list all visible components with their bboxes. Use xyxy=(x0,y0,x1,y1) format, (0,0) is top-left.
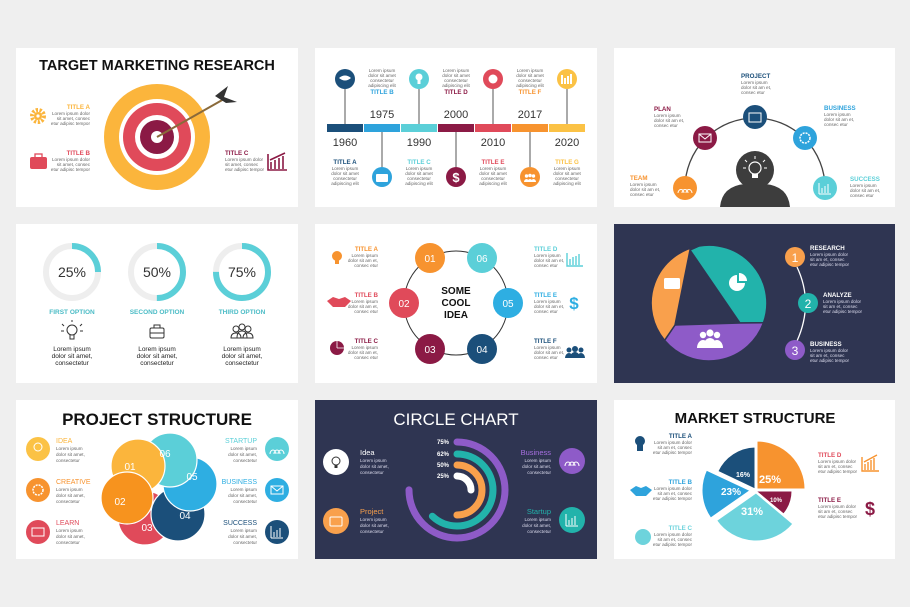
steps: etur adipisc tempor xyxy=(810,262,850,267)
labels: dolor sit am et, xyxy=(630,187,660,192)
item: title C: sit amet, consec xyxy=(225,162,259,167)
swirl circle xyxy=(651,245,767,361)
left items: consec etur xyxy=(354,263,378,268)
option texts: consectetur xyxy=(140,360,175,367)
left items: consectetur xyxy=(56,458,80,463)
left items: dolor sit amet, xyxy=(56,493,85,498)
left items: etur adipisc tempor xyxy=(653,542,692,547)
timeline bar xyxy=(327,124,585,132)
donut 50: 50% xyxy=(143,264,171,280)
steps: 2 xyxy=(805,297,812,311)
right items: consec etur xyxy=(534,355,558,360)
left items: LEARN xyxy=(56,520,79,527)
item: title B: Lorem ipsum dolor xyxy=(52,157,90,162)
flower petals: 04 xyxy=(179,511,191,522)
left items: Lorem ipsum xyxy=(360,458,387,463)
timeline texts: Lorem ipsum xyxy=(369,68,395,73)
right items: dolor sit amet, xyxy=(228,534,257,539)
timeline texts: dolor sit amet xyxy=(368,73,397,78)
title: TARGET MARKETING RESEARCH xyxy=(39,58,275,74)
years: 1975 xyxy=(370,109,394,121)
timeline texts xyxy=(331,68,582,186)
pie chart xyxy=(702,441,805,541)
left items: consectetur xyxy=(360,470,384,475)
right items: TITLE F xyxy=(534,338,557,345)
right items xyxy=(818,452,879,519)
timeline texts: adipiscing elit xyxy=(331,181,360,186)
item: title A xyxy=(32,104,91,126)
timeline texts: dolor sit amet xyxy=(553,171,582,176)
timeline texts: TITLE E xyxy=(481,159,505,166)
option texts xyxy=(52,346,263,367)
center text xyxy=(441,286,471,321)
labels: Lorem ipsum xyxy=(850,183,877,188)
timeline texts: Lorem ipsum xyxy=(480,166,506,171)
timeline texts: TITLE B xyxy=(370,89,394,96)
item: title C: Lorem ipsum dolor xyxy=(225,157,264,162)
timeline texts: consectetur xyxy=(518,78,542,83)
left items: consectetur xyxy=(56,499,80,504)
right items: sit am et, consec xyxy=(818,509,853,514)
timeline texts: consectetur xyxy=(407,176,431,181)
right items: BUSINESS xyxy=(222,479,257,486)
timeline texts: consectetur xyxy=(370,78,394,83)
left items xyxy=(327,246,379,360)
years: 2017 xyxy=(518,109,542,121)
right items xyxy=(534,246,585,360)
item: title B xyxy=(30,150,91,172)
donut 75 xyxy=(216,246,268,316)
title: CIRCLE CHART xyxy=(393,410,519,429)
left items: Lorem ipsum dolor xyxy=(654,486,692,491)
right items: consec etur xyxy=(534,263,558,268)
left items: Lorem ipsum xyxy=(360,517,387,522)
left items: sit am et, consec xyxy=(658,445,693,450)
timeline texts: Lorem ipsum xyxy=(332,166,358,171)
option texts: dolor sit amet, xyxy=(222,353,263,360)
pie chart: 10% xyxy=(770,498,783,504)
right items: consectetur xyxy=(233,458,257,463)
item: title C xyxy=(225,150,287,172)
steps: etur adipisc tempor xyxy=(823,309,863,314)
steps: Lorem ipsum dolor xyxy=(810,348,849,353)
left items: dolor sit am et, xyxy=(348,258,378,263)
center text: SOME xyxy=(441,286,471,297)
steps: sit am et, consec xyxy=(810,257,845,262)
panel: circle chart (dark) xyxy=(315,400,597,559)
years: 2020 xyxy=(555,137,579,149)
steps: 1 xyxy=(792,251,799,265)
timeline texts: TITLE F xyxy=(519,89,542,96)
right items: dolor sit amet, xyxy=(228,452,257,457)
timeline texts: Lorem ipsum xyxy=(554,166,580,171)
timeline texts: Lorem ipsum xyxy=(517,68,543,73)
left items: etur adipisc tempor xyxy=(653,450,692,455)
labels: Lorem ipsum xyxy=(824,112,851,117)
left items: TITLE C xyxy=(355,338,379,345)
item: title B: sit amet, consec xyxy=(57,162,91,167)
numbered circles: 03 xyxy=(424,345,436,356)
left items: Lorem ipsum dolor xyxy=(654,532,692,537)
timeline texts: dolor sit amet xyxy=(331,171,360,176)
flower petals: 02 xyxy=(114,497,126,508)
left items: sit am et, consec xyxy=(658,491,693,496)
left items: Idea xyxy=(360,448,375,457)
left items: Lorem ipsum xyxy=(351,253,378,258)
right items: consectetur xyxy=(233,540,257,545)
left items: Lorem ipsum xyxy=(351,299,378,304)
years: 1990 xyxy=(407,137,431,149)
option texts: consectetur xyxy=(55,360,90,367)
left items: Lorem ipsum xyxy=(351,345,378,350)
labels: Lorem ipsum xyxy=(741,80,768,85)
steps: sit am et, consec xyxy=(810,353,845,358)
labels: PROJECT xyxy=(741,73,770,80)
right items: Lorem ipsum xyxy=(524,517,551,522)
right items: $ xyxy=(569,294,579,313)
right items: Lorem ipsum xyxy=(230,528,257,533)
left items: TITLE A xyxy=(669,433,693,440)
item: title C: TITLE C xyxy=(225,150,249,157)
timeline icons xyxy=(335,69,577,187)
timeline texts: adipiscing elit xyxy=(479,181,508,186)
right items: consec etur xyxy=(534,309,558,314)
item: title A: TITLE A xyxy=(67,104,91,111)
steps: etur adipisc tempor xyxy=(810,358,850,363)
connector lines xyxy=(345,89,567,167)
timeline texts: TITLE A xyxy=(333,159,357,166)
right items: Business xyxy=(521,448,551,457)
right items: Lorem ipsum xyxy=(534,253,561,258)
timeline texts: consectetur xyxy=(555,176,579,181)
right items: dolor sit amet, xyxy=(228,493,257,498)
left items: dolor sit amet, xyxy=(56,452,85,457)
left items: Lorem ipsum xyxy=(56,446,83,451)
donut 25: 25% xyxy=(58,264,86,280)
flower petals xyxy=(101,433,217,545)
target chart xyxy=(104,84,237,190)
percent labels xyxy=(437,440,450,480)
timeline texts: dolor sit amet xyxy=(479,171,508,176)
left items: dolor sit am et, xyxy=(348,304,378,309)
left items: Lorem ipsum dolor xyxy=(654,440,692,445)
years: 2000 xyxy=(444,109,468,121)
labels: Lorem ipsum xyxy=(654,113,681,118)
left items: consec etur xyxy=(354,355,378,360)
left items: etur adipisc tempor xyxy=(653,496,692,501)
nodes xyxy=(673,105,837,200)
item: title C: etur adipisc tempor xyxy=(225,167,265,172)
right items: dolor sit am et, xyxy=(534,258,564,263)
option texts: dolor sit amet, xyxy=(52,353,93,360)
numbered circles: 04 xyxy=(476,345,488,356)
left items: dolor sit amet, xyxy=(360,523,389,528)
left items xyxy=(26,437,91,545)
left items: dolor sit am et, xyxy=(348,350,378,355)
left items: consec etur xyxy=(354,309,378,314)
timeline texts: adipiscing elit xyxy=(553,181,582,186)
donut 25: FIRST OPTION xyxy=(49,309,95,316)
donut 50 xyxy=(130,246,185,316)
steps: sit am et, consec xyxy=(823,304,858,309)
labels: TEAM xyxy=(630,175,648,182)
right items: TITLE E xyxy=(534,292,557,299)
pie chart: 25% xyxy=(759,474,781,486)
flower petals: 03 xyxy=(141,523,153,534)
labels: consec etur xyxy=(630,192,654,197)
timeline texts: consectetur xyxy=(481,176,505,181)
center text: COOL xyxy=(442,298,470,309)
steps arc xyxy=(797,267,806,341)
numbered circles: 05 xyxy=(502,299,514,310)
numbered circles: 06 xyxy=(476,254,488,265)
item: title B: etur adipisc tempor xyxy=(51,167,90,172)
right items: etur adipisc tempor xyxy=(818,514,858,519)
option texts: dolor sit amet, xyxy=(137,353,178,360)
labels: dolor sit am et, xyxy=(741,85,771,90)
right items: dolor sit amet, xyxy=(522,464,551,469)
right items xyxy=(222,437,289,545)
right items: etur adipisc tempor xyxy=(818,469,858,474)
panel: target marketing research xyxy=(16,48,298,207)
numbered circles: 01 xyxy=(424,254,436,265)
steps: Lorem ipsum dolor xyxy=(823,299,862,304)
donut 50: SECOND OPTION xyxy=(130,309,185,316)
labels: PLAN xyxy=(654,106,671,113)
right items: consectetur xyxy=(233,499,257,504)
donut 75: THIRD OPTION xyxy=(219,309,266,316)
steps xyxy=(785,245,863,363)
panel: head arc xyxy=(614,48,895,207)
years xyxy=(333,109,579,149)
right items: Lorem ipsum xyxy=(230,446,257,451)
percent labels: 25% xyxy=(437,474,450,480)
right items xyxy=(521,448,585,534)
timeline texts: Lorem ipsum xyxy=(406,166,432,171)
right items: STARTUP xyxy=(225,438,257,445)
right items: Lorem ipsum dolor xyxy=(818,459,857,464)
percent labels: 62% xyxy=(437,452,450,458)
timeline texts: adipiscing elit xyxy=(405,181,434,186)
right items: Lorem ipsum xyxy=(534,345,561,350)
pie chart: 23% xyxy=(721,487,741,498)
numbered circles xyxy=(389,243,523,364)
left items: dolor sit amet, xyxy=(56,534,85,539)
center text: IDEA xyxy=(444,310,468,321)
right items: consectetur xyxy=(527,529,551,534)
timeline texts: dolor sit amet xyxy=(442,73,471,78)
left items: IDEA xyxy=(56,438,73,445)
steps: ANALYZE xyxy=(823,292,852,299)
right items: Lorem ipsum xyxy=(230,487,257,492)
labels: BUSINESS xyxy=(824,105,856,112)
labels: consec etur xyxy=(850,193,874,198)
option texts: consectetur xyxy=(225,360,260,367)
right items: $ xyxy=(865,499,875,519)
right items: dolor sit am et, xyxy=(534,304,564,309)
timeline texts: TITLE G xyxy=(555,159,579,166)
left items xyxy=(323,448,389,534)
timeline icons: $ xyxy=(452,170,460,185)
left items: TITLE A xyxy=(355,246,379,253)
panel: some cool idea xyxy=(315,224,597,383)
right items: TITLE E xyxy=(818,497,841,504)
years: 1960 xyxy=(333,137,357,149)
left items: consectetur xyxy=(56,540,80,545)
title: PROJECT STRUCTURE xyxy=(62,410,252,429)
left items: TITLE B xyxy=(355,292,379,299)
panel: percentage donuts xyxy=(16,224,298,383)
left items: Lorem ipsum xyxy=(56,528,83,533)
labels: dolor sit am et, xyxy=(850,188,880,193)
steps: BUSINESS xyxy=(810,341,842,348)
left items: CREATIVE xyxy=(56,479,91,486)
left items: consectetur xyxy=(360,529,384,534)
flower petals: 01 xyxy=(124,462,136,473)
left items: dolor sit amet, xyxy=(360,464,389,469)
right items: Startup xyxy=(527,507,551,516)
timeline texts: consectetur xyxy=(444,78,468,83)
labels: consec etur xyxy=(654,123,678,128)
item: title A: sit amet, consec xyxy=(57,116,91,121)
labels: dolor sit am et, xyxy=(654,118,684,123)
left items: TITLE C xyxy=(669,525,693,532)
flower petals: 05 xyxy=(186,472,198,483)
timeline texts: Lorem ipsum xyxy=(443,68,469,73)
left items: Project xyxy=(360,507,384,516)
right items: SUCCESS xyxy=(223,520,257,527)
radial bars xyxy=(409,442,505,538)
numbered circles: 02 xyxy=(398,299,410,310)
item: title B: TITLE B xyxy=(67,150,91,157)
percent labels: 75% xyxy=(437,440,450,446)
labels: SUCCESS xyxy=(850,176,880,183)
panel: market structure xyxy=(614,400,895,559)
timeline texts: consectetur xyxy=(333,176,357,181)
arc xyxy=(685,118,825,188)
labels: dolor sit am et, xyxy=(824,117,854,122)
pie chart: 16% xyxy=(736,472,751,479)
timeline texts: adipiscing elit xyxy=(516,83,545,88)
left items xyxy=(630,433,693,547)
panel: timeline xyxy=(315,48,597,207)
donut 25 xyxy=(46,246,98,316)
timeline texts: TITLE D xyxy=(444,89,468,96)
timeline texts: dolor sit amet xyxy=(405,171,434,176)
right items: dolor sit am et, xyxy=(534,350,564,355)
labels: Lorem ipsum xyxy=(630,182,657,187)
steps: Lorem ipsum dolor xyxy=(810,252,849,257)
head silhouette xyxy=(720,151,790,207)
timeline texts: dolor sit amet xyxy=(516,73,545,78)
panel: swirl cycle (dark) xyxy=(614,224,895,383)
flower petals: 06 xyxy=(159,449,171,460)
labels: consec etur xyxy=(824,122,848,127)
ring xyxy=(404,251,508,355)
right items: dolor sit amet, xyxy=(522,523,551,528)
steps: RESEARCH xyxy=(810,245,845,252)
option texts: Lorem ipsum xyxy=(53,346,91,353)
left items: Lorem ipsum xyxy=(56,487,83,492)
option texts: Lorem ipsum xyxy=(138,346,176,353)
item: title A: etur adipisc tempor xyxy=(51,121,90,126)
title: MARKET STRUCTURE xyxy=(675,410,835,427)
right items: consectetur xyxy=(527,470,551,475)
right items: TITLE D xyxy=(534,246,558,253)
option texts: Lorem ipsum xyxy=(223,346,261,353)
labels: consec etur xyxy=(741,90,765,95)
right items: Lorem ipsum dolor xyxy=(818,504,857,509)
right items: Lorem ipsum xyxy=(534,299,561,304)
years: 2010 xyxy=(481,137,505,149)
left items: TITLE B xyxy=(669,479,693,486)
steps: 3 xyxy=(792,344,799,358)
timeline texts: TITLE C xyxy=(407,159,431,166)
left items: sit am et, consec xyxy=(658,537,693,542)
donut 75: 75% xyxy=(228,264,256,280)
pie chart: 31% xyxy=(741,506,763,518)
panel: project structure xyxy=(16,400,298,559)
percent labels: 50% xyxy=(437,463,450,469)
right items: sit am et, consec xyxy=(818,464,853,469)
option icons xyxy=(61,320,253,339)
timeline texts: adipiscing elit xyxy=(368,83,397,88)
timeline texts: adipiscing elit xyxy=(442,83,471,88)
item: title A: Lorem ipsum dolor xyxy=(52,111,90,116)
labels xyxy=(630,73,880,198)
right items: Lorem ipsum xyxy=(524,458,551,463)
right items: TITLE D xyxy=(818,452,842,459)
